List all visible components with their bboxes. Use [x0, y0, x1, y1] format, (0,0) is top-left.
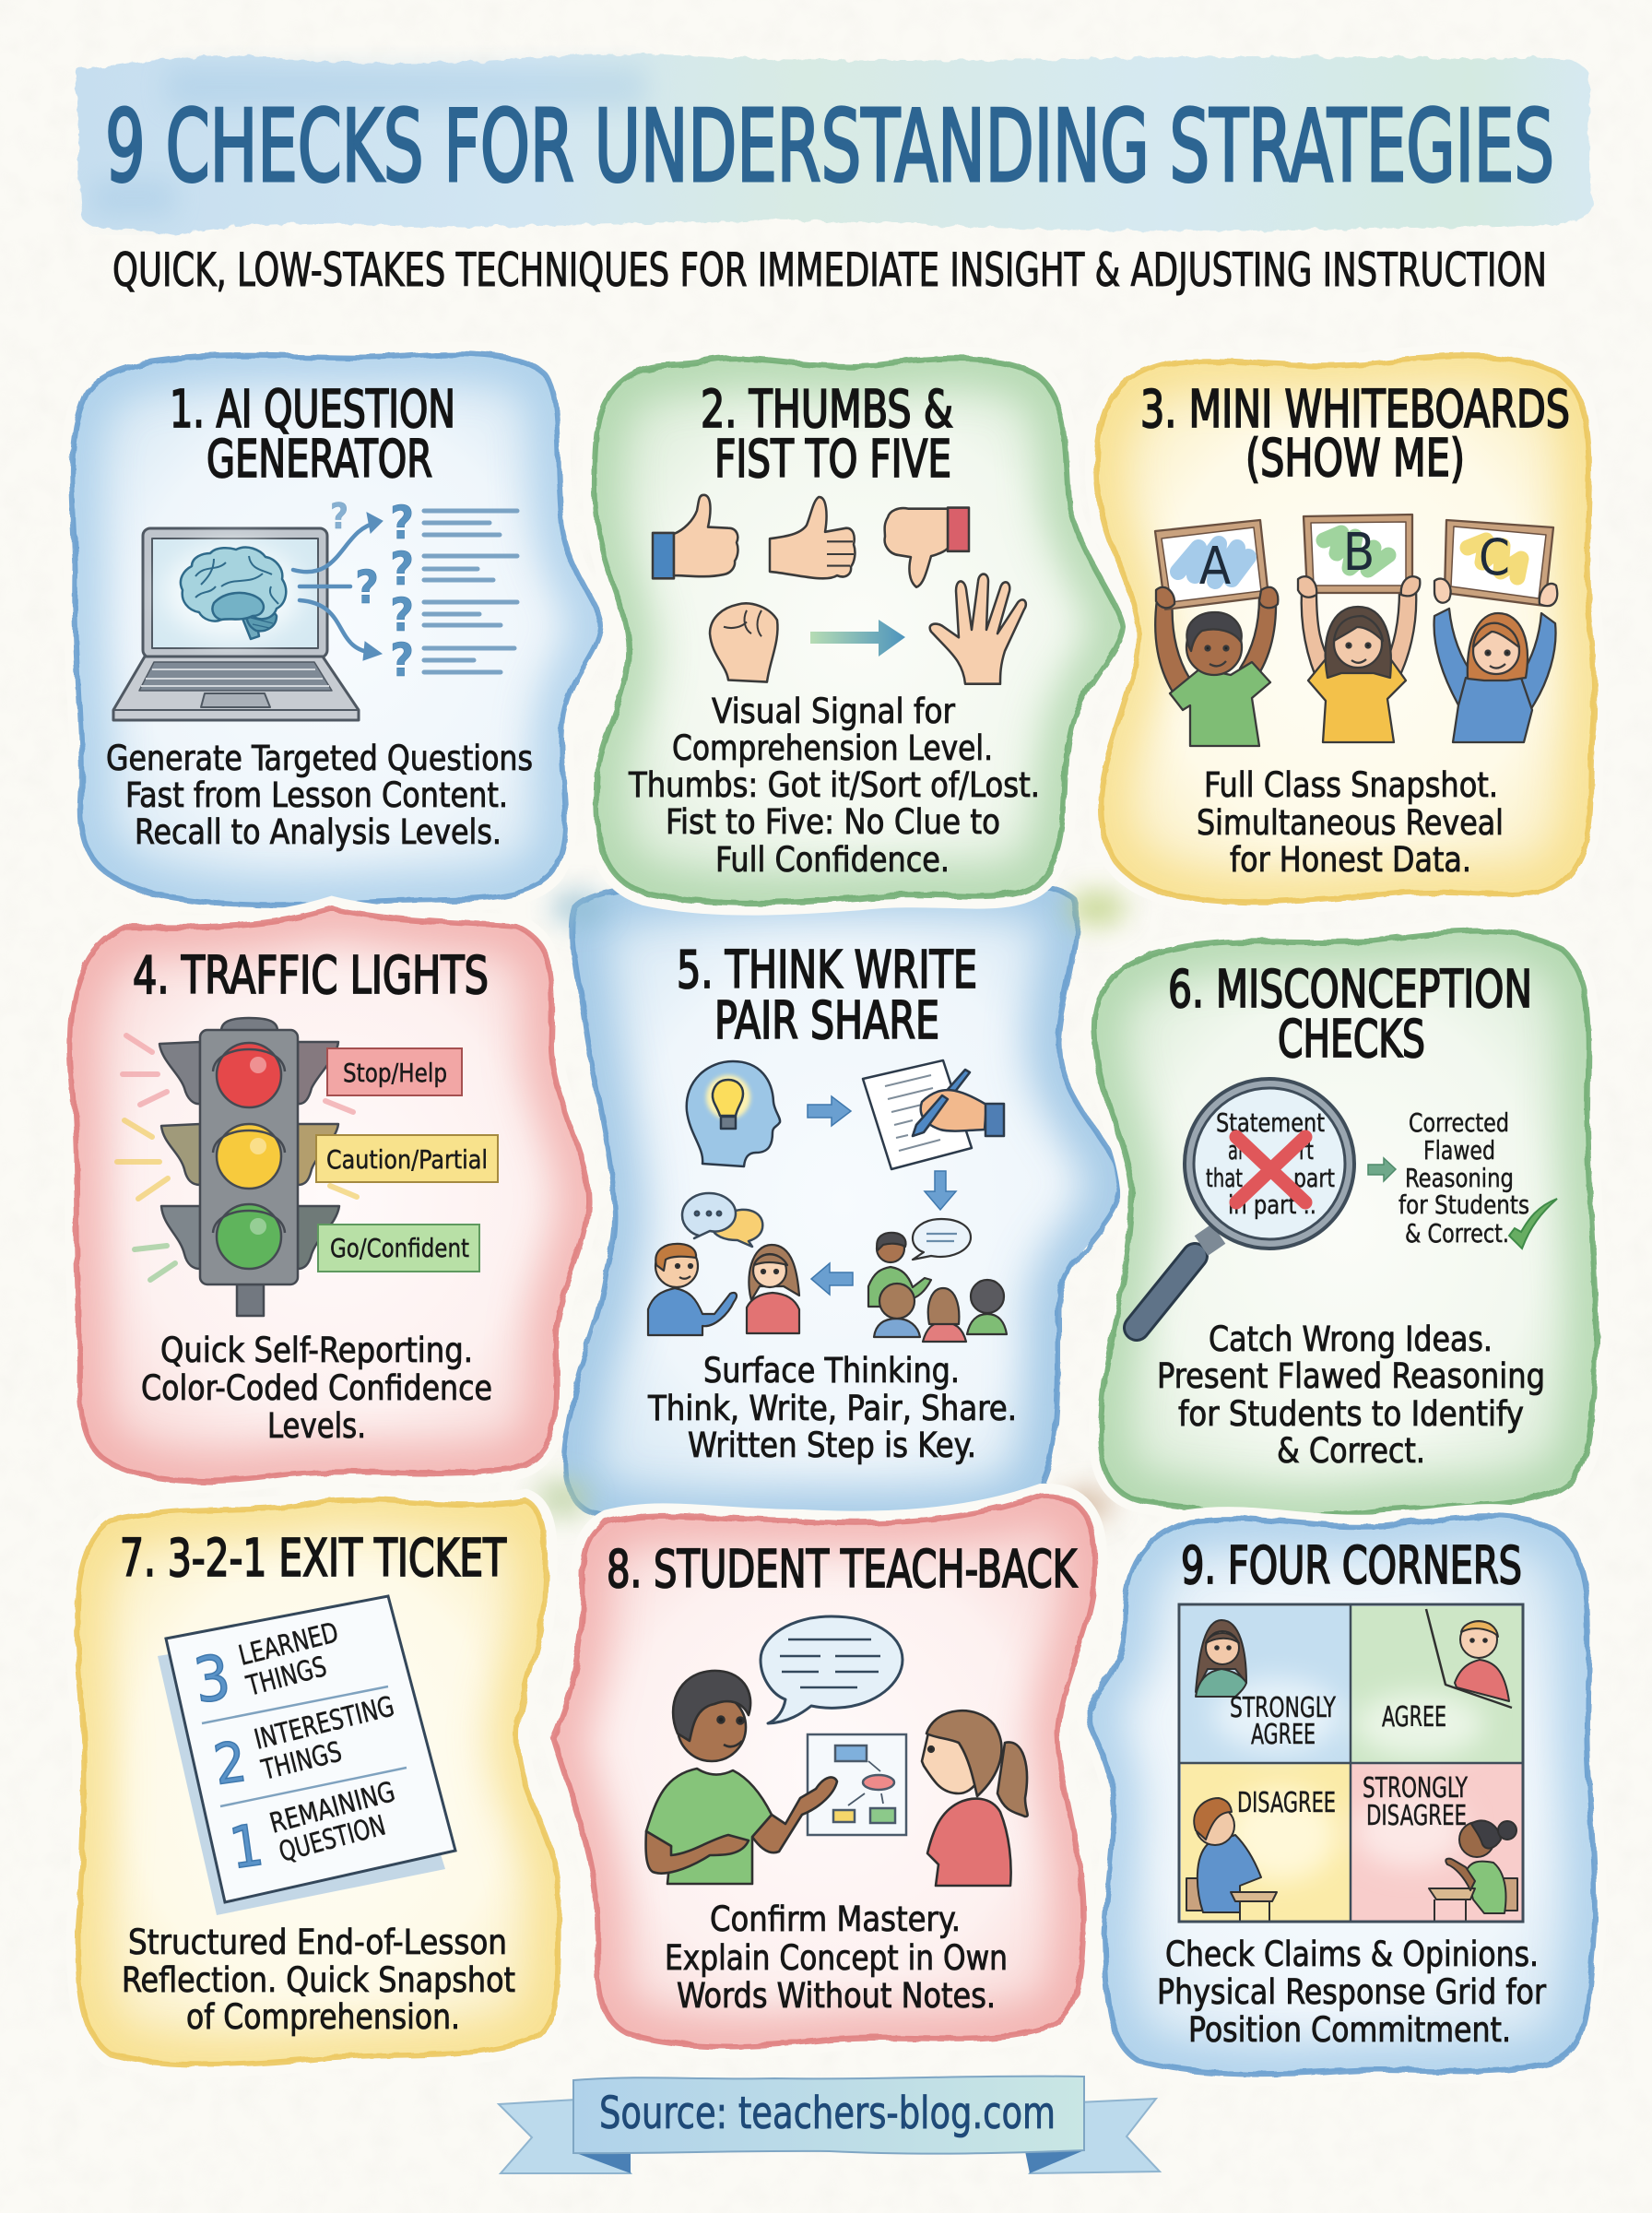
icon: check mark	[1509, 1199, 1557, 1249]
quadrant labels: DISAGREE	[1366, 1800, 1467, 1832]
icon: thumb sideways	[770, 497, 855, 578]
icon: laptop with brain	[113, 528, 359, 720]
grid lines	[1179, 1604, 1523, 1922]
icon: exit ticket sheet: THINGS	[258, 1736, 345, 1787]
panel 3: mini whiteboards	[1097, 356, 1595, 903]
student A with whiteboard: A	[1199, 537, 1232, 597]
description	[141, 1331, 492, 1446]
heading: 4. TRAFFIC LIGHTS	[133, 946, 489, 1006]
description: for Students to Identify	[1178, 1394, 1524, 1434]
heading: 7. 3-2-1 EXIT TICKET	[120, 1529, 506, 1589]
icon: brain	[181, 548, 286, 639]
description	[628, 692, 1040, 880]
corrected text	[1398, 1107, 1529, 1249]
heading: GENERATOR	[206, 430, 432, 490]
four corners grid	[1179, 1604, 1523, 1922]
description: Visual Signal for	[712, 692, 955, 731]
panel 8: student teach-back	[553, 1496, 1095, 2046]
description	[1157, 1320, 1545, 1471]
heading	[170, 380, 455, 490]
icon: exit ticket sheet: 3	[190, 1641, 235, 1717]
icon: thinking head with light bulb	[687, 1061, 780, 1166]
panel 1: AI question generator	[72, 354, 601, 905]
question marks: ?	[390, 542, 414, 596]
description: Written Step is Key.	[688, 1426, 976, 1465]
panel 6: misconception checks	[1095, 931, 1596, 1516]
description	[647, 1351, 1017, 1465]
icon: exit ticket sheet: INTERESTING	[251, 1690, 397, 1757]
icon: thumbs down	[885, 508, 969, 587]
heading: (SHOW ME)	[1245, 429, 1465, 489]
heading: 6. MISCONCEPTION	[1168, 960, 1532, 1020]
heading: 5. THINK WRITE	[677, 941, 977, 1000]
student: disagree	[1186, 1798, 1277, 1922]
description: Thumbs: Got it/Sort of/Lost.	[628, 765, 1040, 805]
heading: 1. AI QUESTION	[170, 380, 455, 440]
pair of students	[648, 1244, 799, 1335]
description: Present Flawed Reasoning	[1157, 1356, 1545, 1396]
icon: exit ticket sheet: QUESTION	[276, 1809, 389, 1869]
student explaining	[646, 1671, 837, 1884]
quadrant labels	[1230, 1692, 1468, 1832]
corrected text: Reasoning	[1405, 1163, 1514, 1193]
label: go/confident: Go/Confident	[330, 1233, 469, 1263]
heading	[1140, 380, 1570, 489]
description: Explain Concept in Own	[665, 1938, 1008, 1978]
icon: traffic light	[159, 1018, 339, 1316]
concept map board	[808, 1734, 906, 1835]
label: stop/help	[327, 1048, 462, 1095]
corrected text: for Students	[1398, 1189, 1529, 1220]
panel 4: traffic lights	[70, 908, 588, 1481]
icon: exit ticket sheet	[158, 1596, 455, 1915]
label: caution/partial	[316, 1135, 498, 1182]
quadrant labels: AGREE	[1251, 1719, 1316, 1751]
description: & Correct.	[1277, 1431, 1425, 1471]
description	[106, 739, 533, 852]
arrow: fist to five	[810, 620, 905, 657]
question marks: ?	[390, 633, 414, 687]
student: strongly agree	[1196, 1620, 1246, 1697]
icon: exit ticket sheet: THINGS	[242, 1651, 330, 1703]
description	[1157, 1935, 1546, 2050]
question marks: ?	[330, 496, 348, 537]
quadrant labels: STRONGLY	[1363, 1772, 1468, 1805]
description: Catch Wrong Ideas.	[1209, 1320, 1493, 1359]
description: Recall to Analysis Levels.	[135, 812, 502, 852]
heading	[677, 941, 977, 1051]
icon: magnifying glass: rt	[1299, 1135, 1314, 1166]
description: Simultaneous Reveal	[1197, 803, 1504, 843]
description: Position Commitment.	[1188, 2010, 1511, 2050]
arrows to questions	[293, 513, 383, 660]
description: Generate Targeted Questions	[106, 739, 533, 778]
icon: exit ticket sheet: 2	[210, 1730, 250, 1798]
icon: magnifying glass: that	[1206, 1163, 1243, 1193]
description: Confirm Mastery.	[710, 1899, 961, 1939]
red cross	[1236, 1137, 1305, 1202]
student B with whiteboard	[1298, 515, 1420, 742]
description: Structured End-of-Lesson	[128, 1923, 507, 1962]
label: caution/partial: Caution/Partial	[326, 1144, 488, 1175]
heading: 8. STUDENT TEACH-BACK	[607, 1540, 1079, 1600]
question marks: ?	[355, 561, 379, 614]
student C with whiteboard: C	[1479, 528, 1510, 586]
description: Reflection. Quick Snapshot	[122, 1960, 515, 2000]
description: Think, Write, Pair, Share.	[647, 1389, 1017, 1428]
description: Full Confidence.	[715, 840, 950, 880]
source ribbon	[499, 2077, 1160, 2173]
icon: magnifying glass: Statement	[1216, 1107, 1325, 1138]
icon: magnifying glass: in part ..	[1228, 1189, 1316, 1220]
arrow	[811, 1263, 853, 1295]
icon: exit ticket sheet: 1	[226, 1811, 267, 1882]
description	[665, 1899, 1008, 2016]
corner colour blends	[535, 890, 1127, 1521]
label: stop/help: Stop/Help	[343, 1058, 447, 1088]
corrected text: Corrected	[1409, 1107, 1509, 1138]
icon: fist	[710, 603, 778, 682]
speech bubble	[761, 1616, 903, 1723]
heading: PAIR SHARE	[714, 991, 939, 1051]
description: of Comprehension.	[186, 1997, 460, 2037]
question marks: ?	[390, 588, 414, 642]
panel 9: four corners	[1088, 1516, 1595, 2074]
icon: writing hand on paper	[863, 1060, 1004, 1169]
heading: 9. FOUR CORNERS	[1181, 1536, 1522, 1596]
heading: 2. THUMBS &	[701, 380, 953, 440]
description: Comprehension Level.	[672, 728, 993, 768]
description: Fist to Five: No Clue to	[666, 802, 1000, 842]
label: go/confident	[318, 1225, 479, 1272]
quadrant labels: STRONGLY	[1230, 1692, 1336, 1724]
quadrant labels: AGREE	[1382, 1701, 1446, 1734]
heading: CHECKS	[1278, 1010, 1425, 1070]
corrected text: Flawed	[1423, 1135, 1495, 1166]
glow rays	[117, 1035, 357, 1280]
description: Quick Self-Reporting.	[160, 1331, 473, 1370]
icon: magnifying glass	[1137, 1079, 1354, 1328]
icon: exit ticket sheet: LEARNED	[235, 1616, 342, 1673]
group sharing	[868, 1219, 1007, 1342]
heading	[1168, 960, 1532, 1070]
student B with whiteboard: B	[1343, 523, 1375, 583]
description: Full Class Snapshot.	[1204, 765, 1498, 805]
student A with whiteboard	[1155, 520, 1278, 746]
title banner	[74, 54, 1593, 235]
arrow	[1368, 1158, 1396, 1181]
description: Levels.	[267, 1406, 366, 1446]
description: Color-Coded Confidence	[141, 1368, 492, 1408]
description: Surface Thinking.	[703, 1351, 960, 1391]
heading: FIST TO FIVE	[714, 430, 951, 490]
icons: hand signals	[653, 495, 1026, 684]
description	[122, 1923, 515, 2037]
icon: magnifying glass: part	[1293, 1163, 1335, 1193]
description: for Honest Data.	[1230, 840, 1471, 880]
quadrant labels: DISAGREE	[1237, 1787, 1336, 1819]
heading: 3. MINI WHITEBOARDS	[1140, 380, 1570, 440]
icon: open hand	[930, 574, 1026, 684]
panel 7: exit ticket	[77, 1499, 559, 2065]
arrow	[925, 1171, 956, 1210]
panel 5: think write pair share	[564, 881, 1121, 1524]
description	[1197, 765, 1504, 880]
arrow	[808, 1096, 851, 1126]
description: Physical Response Grid for	[1157, 1972, 1546, 2012]
icon: magnifying glass: al	[1228, 1135, 1243, 1166]
description: Words Without Notes.	[677, 1976, 996, 2016]
corrected text: & Correct.	[1405, 1218, 1509, 1249]
description: Check Claims & Opinions.	[1165, 1935, 1539, 1974]
panel 2: thumbs and fist to five	[595, 359, 1123, 903]
student listening	[922, 1710, 1028, 1886]
generated question lines	[424, 511, 517, 672]
question marks: ?	[390, 496, 414, 550]
icon: speech bubbles	[682, 1193, 762, 1247]
question marks	[330, 496, 414, 687]
student C with whiteboard	[1434, 520, 1557, 742]
heading	[701, 380, 953, 490]
student: agree	[1426, 1609, 1512, 1708]
description: Fast from Lesson Content.	[125, 775, 508, 815]
icon: exit ticket sheet: REMAINING	[266, 1776, 398, 1840]
icon: thumbs up	[653, 495, 738, 578]
student: strongly disagree	[1429, 1820, 1517, 1922]
source text: Source: teachers-blog.com	[599, 2088, 1056, 2139]
